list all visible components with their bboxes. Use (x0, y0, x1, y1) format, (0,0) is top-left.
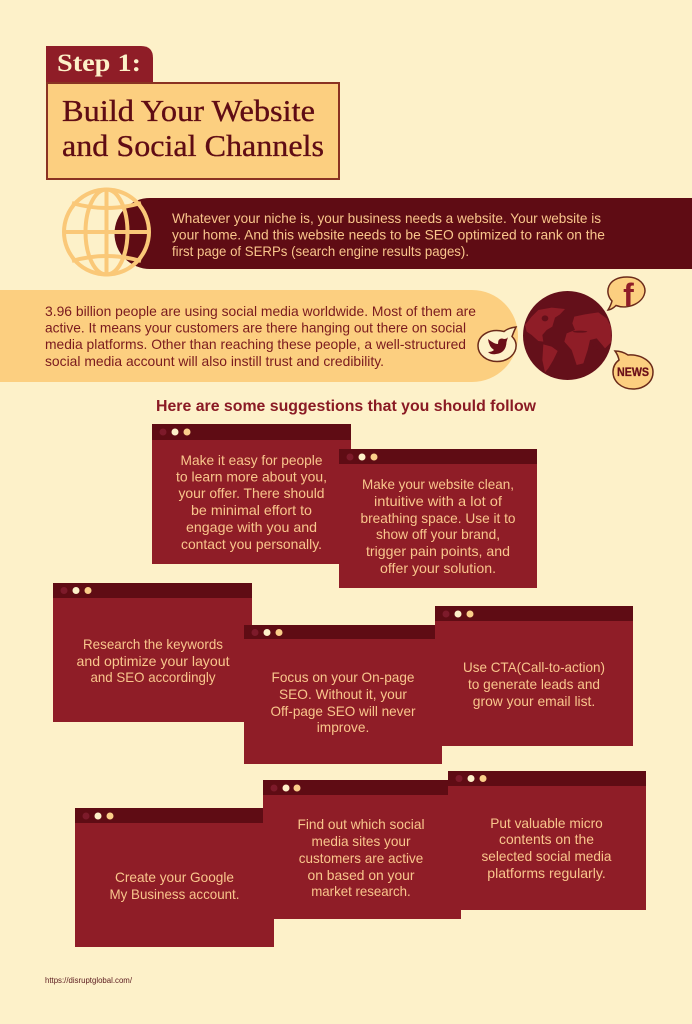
card: find social sites: customers are active (299, 851, 423, 866)
card: find social sites (263, 780, 461, 919)
card: micro contents: Put valuable micro (490, 816, 603, 831)
card: on-page SEO (244, 625, 442, 764)
website text: Whatever your niche is, your business needs a website. Your website is (172, 211, 601, 226)
card: find social sites: on based on your (308, 868, 415, 883)
card: micro contents (448, 771, 646, 910)
card: micro contents: selected social media (482, 849, 612, 864)
card: on-page SEO: Off-page SEO will never (270, 704, 416, 719)
card: find social sites: Find out which social (298, 817, 424, 832)
card: call to action: grow your email list. (473, 694, 595, 709)
social media text: media platforms. Other than reaching these people, a well-structured (45, 337, 466, 352)
social media text: active. It means your customers are there hanging out there on social (45, 320, 466, 336)
icon: wireframe globe (64, 190, 149, 275)
card: google my business (75, 808, 274, 947)
icon: news bubble: NEWS (617, 365, 649, 379)
panel: social media band (0, 290, 518, 382)
social media text: 3.96 billion people are using social media worldwide. Most of them are (45, 304, 476, 319)
title box: and Social Channels (62, 128, 324, 163)
card: clean website: breathing space. Use it to (360, 511, 516, 526)
card: clean website (339, 449, 537, 588)
card: make it easy: to learn more about you, (176, 470, 327, 484)
title box (47, 83, 339, 179)
card: micro contents: platforms regularly. (487, 866, 606, 881)
social media text: social media account will also instill trust and credibility. (45, 354, 384, 369)
icon: earth globe (523, 291, 612, 380)
website text: first page of SERPs (search engine results pages). (172, 244, 469, 259)
icon: facebook bubble (608, 277, 645, 313)
card: research keywords: and optimize your layout (76, 654, 230, 669)
card: research keywords: Research the keywords (83, 637, 223, 652)
card: micro contents: contents on the (499, 832, 594, 847)
card: on-page SEO: SEO. Without it, your (279, 687, 407, 702)
card: research keywords (53, 583, 252, 722)
panel: website band (114, 198, 692, 269)
card: on-page SEO: improve. (317, 720, 369, 735)
card: make it easy: be minimal effort to (191, 503, 312, 518)
card: clean website: show off your brand, (376, 527, 500, 542)
card: find social sites: media sites your (312, 834, 411, 849)
card: call to action: Use CTA(Call-to-action) (463, 660, 605, 675)
card: clean website: trigger pain points, and (366, 544, 510, 559)
card: make it easy: engage with you and (186, 520, 317, 535)
card: clean website: offer your solution. (380, 561, 496, 576)
icon: facebook bubble: f (623, 277, 634, 313)
social media text (45, 304, 476, 369)
card: google my business: My Business account. (110, 887, 240, 902)
website text: your home. And this website needs to be SEO optimized to rank on the (172, 228, 605, 242)
card: clean website: Make your website clean, (362, 477, 514, 492)
title box: Build Your Website (62, 93, 315, 128)
subheading: Here are some suggestions that you should follow (156, 398, 537, 415)
step tab: Step 1: (57, 50, 141, 77)
website text (172, 211, 605, 259)
source link: https://disruptglobal.com/ (45, 976, 133, 985)
card: make it easy: contact you personally. (181, 537, 322, 552)
card: make it easy: Make it easy for people (180, 453, 322, 468)
card: call to action (435, 606, 633, 746)
card: clean website: intuitive with a lot of (374, 494, 502, 509)
card: make it easy (152, 424, 351, 564)
card: on-page SEO: Focus on your On-page (272, 670, 414, 685)
icon: news bubble (613, 351, 653, 389)
card: make it easy: your offer. There should (178, 486, 324, 501)
card: research keywords: and SEO accordingly (90, 670, 216, 685)
card: find social sites: market research. (311, 884, 411, 899)
card: google my business: Create your Google (115, 870, 234, 885)
icon: twitter bubble (478, 327, 516, 362)
card: call to action: to generate leads and (468, 677, 600, 692)
step tab (46, 46, 153, 84)
